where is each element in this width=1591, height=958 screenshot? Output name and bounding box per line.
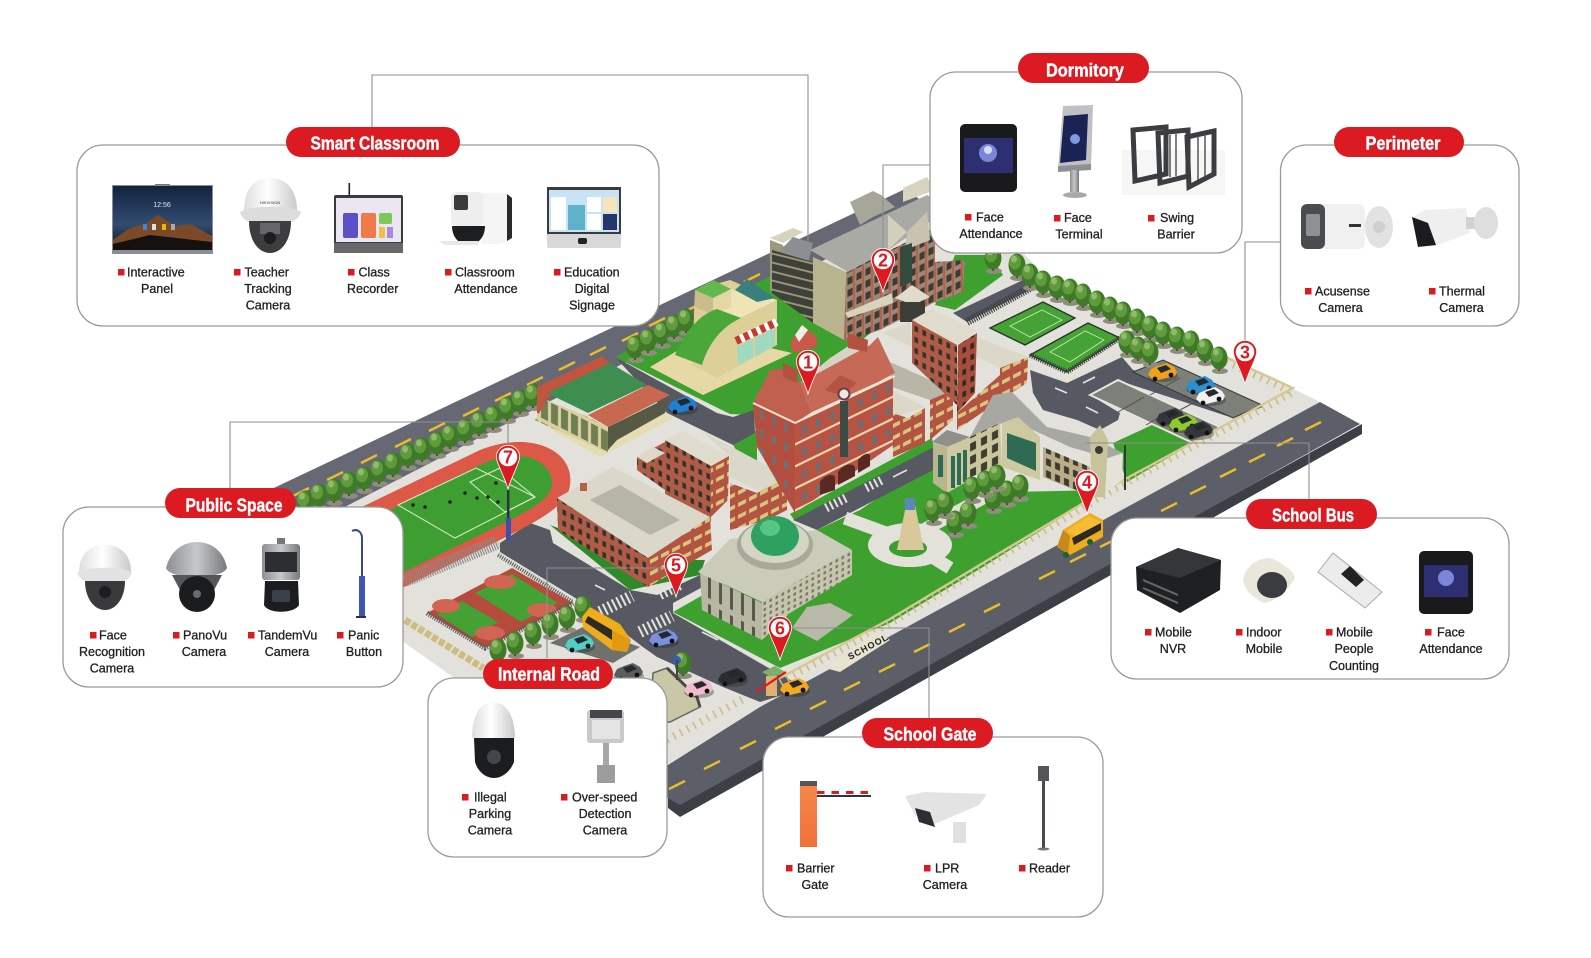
pin 1 — [796, 350, 820, 394]
label: Face Attendance: Attendance — [1419, 642, 1483, 656]
pin 6: 6 — [775, 618, 785, 638]
panel: Public Space — [63, 488, 403, 687]
label: Indoor Mobile: Indoor — [1246, 626, 1281, 640]
location pins — [496, 248, 1257, 660]
label: LPR Camera — [923, 862, 967, 892]
garden paths and statue — [845, 464, 1029, 568]
school buses — [582, 513, 1103, 652]
pin 7 — [496, 445, 520, 489]
label: Illegal Parking Camera: Camera — [468, 824, 512, 838]
icon: Acusense camera — [1301, 204, 1393, 249]
label: PanoVu Camera — [173, 628, 227, 659]
building: east cream hall — [932, 392, 1126, 497]
main road centre dashes — [669, 422, 1321, 789]
pin 4 — [1075, 470, 1099, 514]
icon: indoor mobile camera — [1243, 558, 1295, 603]
label: TandemVu Camera — [248, 628, 317, 659]
label: Teacher Tracking Camera: Tracking — [244, 282, 292, 296]
heading: School Gate — [862, 718, 993, 748]
heading: Internal Road: Internal Road — [498, 664, 600, 684]
label: Over-speed Detection Camera: Camera — [583, 824, 627, 838]
label: Indoor Mobile: Mobile — [1246, 642, 1282, 656]
icon: swing barrier — [1122, 127, 1225, 195]
pin 5: 5 — [671, 556, 681, 576]
label: Barrier Gate — [786, 862, 835, 892]
label: Classroom Attendance — [445, 266, 518, 296]
label: Panic Button — [337, 628, 382, 659]
panel: Perimeter — [1280, 127, 1519, 326]
pin 5 — [664, 553, 688, 597]
label: Illegal Parking Camera — [462, 790, 512, 838]
label: Over-speed Detection Camera — [561, 790, 637, 838]
label: Mobile People Counting: Mobile — [1336, 626, 1373, 640]
icon: mobile NVR — [1136, 548, 1221, 613]
panel: Smart Classroom — [77, 127, 659, 326]
building: gymnasium — [535, 356, 673, 457]
label: PanoVu Camera: Camera — [182, 645, 226, 659]
label: Classroom Attendance: Attendance — [454, 282, 518, 296]
label: Acusense Camera: Camera — [1318, 301, 1363, 315]
label: Education Digital Signage: Signage — [569, 298, 615, 312]
label: Thermal Camera — [1429, 284, 1485, 315]
pin 3: 3 — [1240, 342, 1250, 362]
label: Face Terminal: Face — [1064, 211, 1092, 225]
parking lots — [550, 360, 1262, 663]
label: Education Digital Signage: Digital — [575, 282, 609, 296]
heading: School Gate: School Gate — [884, 724, 976, 744]
school sign and gate: SCHOOL — [846, 632, 890, 662]
label: Interactive Panel — [118, 266, 185, 296]
icon: LPR camera — [905, 792, 987, 843]
pin 4: 4 — [1082, 472, 1092, 492]
icon: teacher tracking camera: HIKVISION — [260, 200, 280, 205]
pin 2 — [871, 248, 895, 292]
label: Mobile People Counting: Counting — [1329, 659, 1379, 673]
icon: PanoVu camera — [166, 542, 227, 612]
label: Class Recorder: Recorder — [347, 282, 398, 296]
panel: School Gate — [763, 718, 1103, 917]
label: Thermal Camera: Camera — [1439, 301, 1484, 315]
label: Education Digital Signage — [554, 266, 620, 312]
label: Panic Button: Panic — [348, 628, 379, 642]
label: Swing Barrier: Barrier — [1157, 228, 1195, 242]
pin 2: 2 — [878, 250, 888, 270]
label: Thermal Camera: Thermal — [1439, 284, 1485, 298]
building: domed library — [698, 516, 853, 641]
label: Teacher Tracking Camera: Camera — [246, 298, 290, 312]
label: Teacher Tracking Camera — [234, 266, 292, 312]
label: Reader: Reader — [1029, 862, 1070, 876]
label: Mobile NVR: NVR — [1160, 642, 1186, 656]
crosswalks and road marks — [595, 377, 1098, 640]
school sign and gate — [756, 632, 890, 696]
icon: barrier gate — [800, 781, 871, 847]
label: Swing Barrier — [1148, 211, 1195, 242]
label: Face Recognition Camera — [79, 628, 145, 676]
heading: Perimeter: Perimeter — [1366, 134, 1440, 154]
heading: Public Space — [165, 488, 296, 518]
pin 7: 7 — [503, 448, 513, 468]
label: PanoVu Camera: PanoVu — [183, 628, 227, 642]
label: Panic Button: Button — [346, 645, 382, 659]
heading: School Bus: School Bus — [1272, 506, 1354, 526]
lawns — [550, 255, 1193, 668]
label: Class Recorder: Class — [358, 266, 390, 280]
icon: face attendance terminal — [960, 124, 1017, 192]
pin 6 — [768, 616, 792, 660]
icon: education digital signage — [547, 187, 621, 248]
label: Face Attendance — [959, 210, 1023, 241]
label: Face Attendance: Attendance — [959, 227, 1023, 241]
label: Barrier Gate: Gate — [801, 878, 829, 892]
icon: class recorder — [334, 183, 403, 253]
icon: thermal camera — [1412, 207, 1498, 247]
label: Over-speed Detection Camera: Detection — [579, 807, 631, 821]
panel: School Bus — [1111, 499, 1509, 679]
heading: Internal Road — [483, 659, 613, 689]
icon: teacher tracking camera — [240, 178, 301, 253]
pin 3 — [1233, 340, 1257, 384]
building: main red block — [753, 309, 1028, 513]
perimeter fences — [405, 356, 1293, 740]
trees — [296, 246, 1228, 679]
building: shop — [650, 279, 817, 395]
label: Teacher Tracking Camera: Teacher — [244, 266, 289, 280]
icon: panic button pole — [352, 530, 366, 618]
outer roads and base — [240, 189, 1362, 817]
label: TandemVu Camera: TandemVu — [258, 628, 317, 642]
label: Illegal Parking Camera: Parking — [469, 807, 511, 821]
label: Acusense Camera — [1305, 284, 1370, 315]
panel: Dormitory — [930, 53, 1242, 253]
panel: Internal Road — [428, 659, 667, 857]
label: Indoor Mobile — [1236, 626, 1282, 656]
label: Education Digital Signage: Education — [564, 266, 620, 280]
heading: Smart Classroom — [286, 127, 460, 157]
pin 1: 1 — [803, 352, 813, 372]
icon: illegal parking camera — [472, 702, 515, 778]
heading: Public Space: Public Space — [186, 496, 282, 516]
icon: interactive panel: 12:56 — [153, 202, 171, 209]
label: Face Terminal — [1054, 211, 1103, 242]
top road centre dashes — [293, 274, 760, 496]
basketball courts — [427, 568, 573, 648]
label: Face Recognition Camera: Camera — [90, 662, 134, 676]
icon: over-speed detection camera — [587, 710, 624, 783]
label: Face Terminal: Terminal — [1055, 228, 1103, 242]
heading: Perimeter — [1334, 127, 1464, 157]
label: Barrier Gate: Barrier — [797, 862, 835, 876]
heading: School Bus — [1246, 499, 1377, 529]
label: Face Attendance: Face — [976, 210, 1004, 224]
icon: mobile people counting — [1318, 553, 1382, 608]
icon: interactive panel — [112, 184, 213, 254]
label: Over-speed Detection Camera: Over-speed — [572, 790, 637, 804]
heading: Smart Classroom: Smart Classroom — [310, 134, 440, 154]
label: Mobile NVR — [1145, 626, 1192, 656]
label: Face Attendance — [1419, 626, 1483, 656]
label: LPR Camera: Camera — [923, 878, 967, 892]
inner roads — [500, 280, 1263, 702]
label: Class Recorder — [347, 266, 398, 296]
heading: Dormitory: Dormitory — [1046, 60, 1124, 80]
campus map — [240, 177, 1362, 817]
connector lines — [230, 75, 1309, 718]
label: Illegal Parking Camera: Illegal — [474, 790, 507, 804]
label: Mobile People Counting — [1326, 626, 1379, 673]
underground entrance — [650, 656, 700, 722]
label: Face Recognition Camera: Recognition — [79, 645, 145, 659]
label: Acusense Camera: Acusense — [1315, 284, 1370, 298]
heading: Dormitory — [1018, 53, 1149, 83]
icon: TandemVu camera — [262, 538, 300, 612]
icon: face attendance device — [1419, 551, 1473, 614]
label: Interactive Panel: Panel — [141, 282, 173, 296]
label: Mobile NVR: Mobile — [1155, 626, 1192, 640]
label: TandemVu Camera: Camera — [265, 645, 309, 659]
label: Face Recognition Camera: Face — [99, 628, 127, 642]
building: west brick block — [557, 430, 788, 587]
label: Swing Barrier: Swing — [1160, 211, 1194, 225]
label: Face Attendance: Face — [1437, 626, 1465, 640]
label: Classroom Attendance: Classroom — [455, 266, 515, 280]
running track and soccer field — [300, 442, 570, 600]
icon: card reader on post — [1038, 766, 1050, 850]
icon: classroom attendance camera — [439, 192, 512, 245]
icon: face terminal on stand — [1058, 105, 1093, 198]
icon: face recognition camera — [77, 545, 132, 610]
tennis courts — [967, 288, 1120, 372]
label: Interactive Panel: Interactive — [127, 266, 185, 280]
cars — [565, 363, 1226, 698]
label: LPR Camera: LPR — [935, 862, 959, 876]
label: Mobile People Counting: People — [1335, 642, 1374, 656]
building: dormitory — [770, 177, 965, 342]
